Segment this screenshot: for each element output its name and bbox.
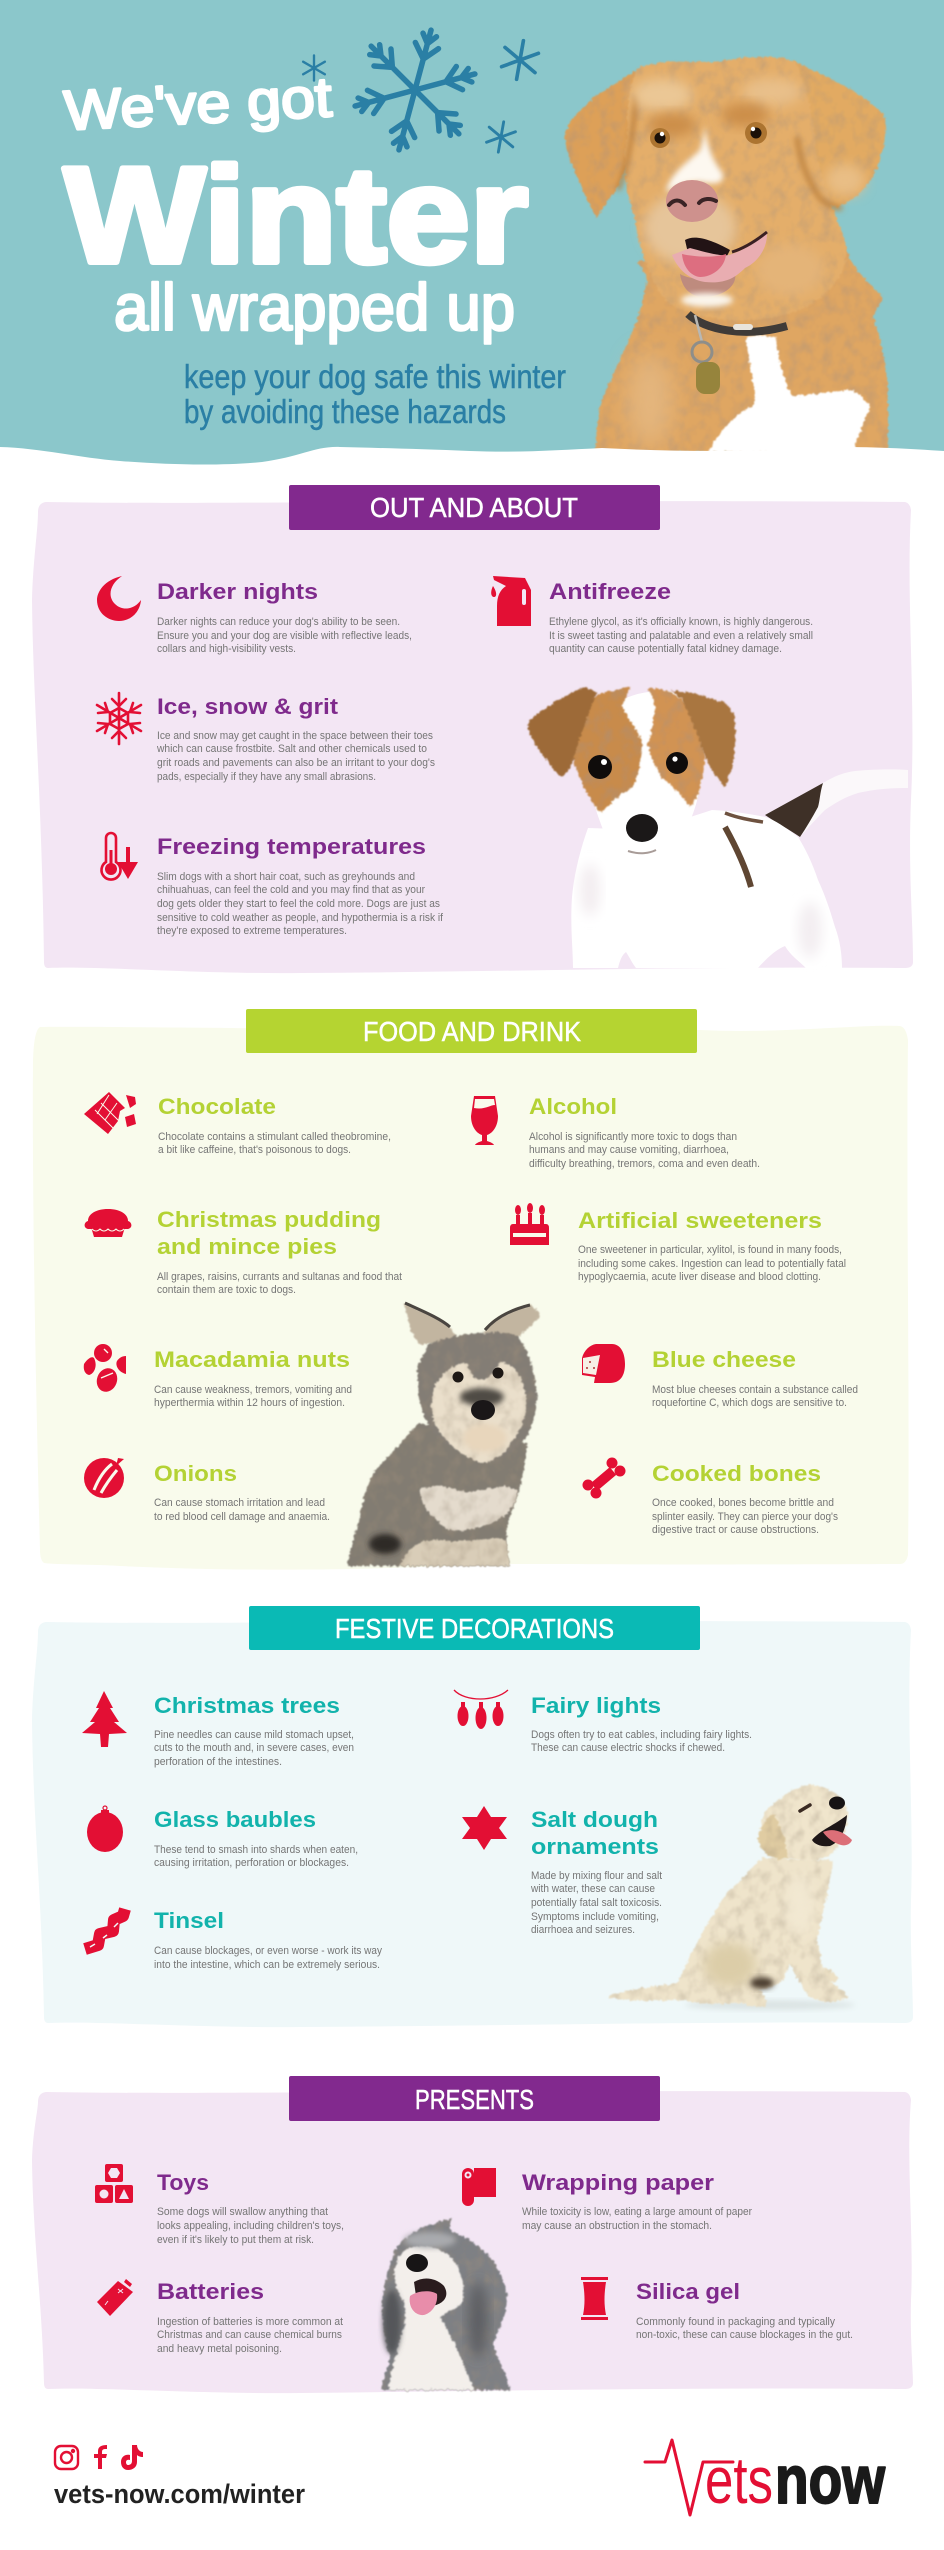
- eyes: [650, 128, 670, 148]
- icon: thermometer: [102, 833, 138, 880]
- icon: wrapping paper roll: [462, 2168, 496, 2206]
- item: darker nights: collars and high-visibility vests.: [157, 643, 296, 655]
- item: ice snow and grit: [97, 693, 435, 783]
- item: christmas trees: Pine needles can cause mild stomach upset,: [154, 1729, 354, 1741]
- item: freezing temperatures: [102, 833, 444, 937]
- item: christmas pudding and mince pies: Christmas pudding: [157, 1207, 381, 1232]
- item: onions: Can cause stomach irritation and lead: [154, 1497, 325, 1509]
- item: onions: to red blood cell damage and anaemia.: [154, 1511, 330, 1523]
- item: wrapping paper: Wrapping paper: [522, 2170, 714, 2195]
- item: ice snow and grit: Ice, snow & grit: [157, 694, 339, 719]
- item: cooked bones: Cooked bones: [652, 1461, 821, 1486]
- item: antifreeze: Ethylene glycol, as it's officially known, is highly dangerous.: [549, 616, 813, 628]
- icon: small snowflake right: [500, 38, 540, 82]
- item: christmas pudding and mince pies: All grapes, raisins, currants and sultanas and food that: [157, 1271, 402, 1283]
- icon: onion: [84, 1458, 124, 1498]
- icon: small snowflake left: [303, 55, 325, 81]
- subtitle: keep your dog safe this winter: [184, 358, 566, 395]
- panel: food and drink: [33, 1009, 909, 1570]
- item: alcohol: [471, 1094, 760, 1170]
- item: tinsel: [85, 1908, 382, 1971]
- item: artificial sweeteners: Artificial sweeteners: [578, 1208, 822, 1233]
- item: macadamia nuts: hyperthermia within 12 hours of ingestion.: [154, 1397, 345, 1409]
- item: freezing temperatures: dog gets older they start to feel the cold more. Dogs are just as: [157, 898, 440, 910]
- item: toys: even if it's likely to put them at risk.: [157, 2234, 314, 2246]
- section heading: PRESENTS: [415, 2084, 534, 2115]
- terrier photo: [347, 1303, 540, 1566]
- item: artificial sweeteners: including some cakes. Ingestion can lead to potentially fatal: [578, 1258, 846, 1270]
- item: glass baubles: [87, 1806, 358, 1869]
- head: [589, 691, 703, 857]
- item: christmas trees: cuts to the mouth and, in severe cases, even: [154, 1742, 354, 1754]
- icon: fairy lights: [454, 1690, 508, 1729]
- logo: vets now: ets: [705, 2443, 773, 2517]
- item: antifreeze: [491, 576, 813, 655]
- item: batteries: Christmas and can cause chemical burns: [157, 2329, 342, 2341]
- item: alcohol: Alcohol is significantly more toxic to dogs than: [529, 1131, 737, 1143]
- item: christmas trees: perforation of the intestines.: [154, 1756, 282, 1768]
- item: salt dough ornaments: Made by mixing flour and salt: [531, 1870, 662, 1882]
- item: cooked bones: Once cooked, bones become brittle and: [652, 1497, 834, 1509]
- item: blue cheese: roquefortine C, which dogs are sensitive to.: [652, 1397, 847, 1409]
- item: freezing temperatures: they're exposed to extreme temperatures.: [157, 925, 347, 937]
- icon: facebook: [94, 2445, 107, 2469]
- item: antifreeze: quantity can cause potentially fatal kidney damage.: [549, 643, 782, 655]
- puppy photo: [528, 688, 908, 968]
- item: salt dough ornaments: Symptoms include vomiting,: [531, 1911, 659, 1923]
- item: blue cheese: [582, 1344, 858, 1409]
- header: [0, 0, 944, 480]
- icon: birthday cake: [510, 1203, 549, 1245]
- item: alcohol: Alcohol: [529, 1094, 617, 1119]
- item: christmas trees: Christmas trees: [154, 1693, 340, 1718]
- section heading: OUT AND ABOUT: [370, 492, 578, 523]
- item: tinsel: Tinsel: [154, 1908, 224, 1933]
- panel background: [32, 501, 913, 973]
- title: [62, 65, 528, 344]
- panel: presents: [32, 2076, 913, 2393]
- item: batteries: Batteries: [157, 2279, 264, 2304]
- icon: instagram: [55, 2446, 78, 2469]
- item: christmas pudding and mince pies: and mince pies: [157, 1234, 337, 1259]
- item: chocolate: Chocolate: [158, 1094, 276, 1119]
- item: tinsel: into the intestine, which can be extremely serious.: [154, 1959, 380, 1971]
- item: alcohol: humans and may cause vomiting, diarrhoea,: [529, 1144, 729, 1156]
- item: chocolate: a bit like caffeine, that's poisonous to dogs.: [158, 1144, 351, 1156]
- golden puppy photo: [607, 1785, 855, 2010]
- section heading: [289, 485, 660, 530]
- item: freezing temperatures: Slim dogs with a short hair coat, such as greyhounds and: [157, 871, 415, 883]
- item: salt dough ornaments: Salt dough: [531, 1807, 658, 1832]
- item: batteries: and heavy metal poisoning.: [157, 2343, 282, 2355]
- item: salt dough ornaments: diarrhoea and seizures.: [531, 1924, 635, 1936]
- nose: [666, 180, 718, 222]
- item: christmas pudding and mince pies: contain them are toxic to dogs.: [157, 1284, 296, 1296]
- item: darker nights: [97, 576, 412, 655]
- collar and tag: [688, 314, 787, 332]
- item: silica gel: Silica gel: [636, 2279, 740, 2304]
- item: freezing temperatures: chihuahuas, can feel the cold and you may find that as your: [157, 884, 425, 896]
- item: blue cheese: Blue cheese: [652, 1347, 796, 1372]
- item: wrapping paper: may cause an obstruction in the stomach.: [522, 2220, 712, 2232]
- bearded collie photo: [380, 2218, 510, 2390]
- item: tinsel: Can cause blockages, or even worse - work its way: [154, 1945, 382, 1957]
- item: batteries: [97, 2279, 343, 2355]
- item: christmas trees: [82, 1691, 354, 1768]
- item: glass baubles: Glass baubles: [154, 1807, 316, 1832]
- item: glass baubles: These tend to smash into shards when eaten,: [154, 1844, 358, 1856]
- item: fairy lights: Fairy lights: [531, 1693, 661, 1718]
- section heading: [289, 2076, 660, 2121]
- item: blue cheese: Most blue cheeses contain a substance called: [652, 1384, 858, 1396]
- muzzle and chin: [680, 272, 735, 297]
- mouth: [685, 238, 730, 262]
- item: salt dough ornaments: ornaments: [531, 1834, 659, 1859]
- item: cooked bones: [582, 1458, 838, 1536]
- item: ice snow and grit: grit roads and pavements can also be an irritant to your dog's: [157, 757, 435, 769]
- item: artificial sweeteners: [510, 1203, 846, 1283]
- icon: wine glass: [471, 1096, 498, 1145]
- item: antifreeze: It is sweet tasting and palatable and even a relatively small: [549, 630, 813, 642]
- panel: festive decorations: [32, 1606, 913, 2027]
- item: salt dough ornaments: [462, 1806, 662, 1936]
- icon: bauble: [87, 1806, 123, 1852]
- section heading: FESTIVE DECORATIONS: [335, 1613, 614, 1644]
- item: fairy lights: Dogs often try to eat cables, including fairy lights.: [531, 1729, 752, 1741]
- item: ice snow and grit: which can cause frostbite. Salt and other chemicals used to: [156, 743, 427, 755]
- item: macadamia nuts: Can cause weakness, tremors, vomiting and: [154, 1384, 352, 1396]
- item: onions: Onions: [154, 1461, 237, 1486]
- header background: [0, 0, 944, 470]
- icon: mince pie: [85, 1209, 131, 1237]
- item: cooked bones: splinter easily. They can pierce your dog's: [652, 1511, 838, 1523]
- item: fairy lights: [454, 1690, 752, 1754]
- golden retriever photo: [565, 57, 888, 452]
- icon: toy blocks: [95, 2164, 133, 2203]
- item: artificial sweeteners: One sweetener in particular, xylitol, is found in many foods,: [578, 1244, 842, 1256]
- title: We've got: [62, 65, 334, 142]
- item: salt dough ornaments: potentially fatal salt toxicosis.: [531, 1897, 662, 1909]
- item: fairy lights: These can cause electric shocks if chewed.: [531, 1742, 725, 1754]
- subtitle: by avoiding these hazards: [184, 393, 506, 430]
- item: wrapping paper: While toxicity is low, eating a large amount of paper: [522, 2206, 752, 2218]
- icon: moon: [97, 576, 141, 621]
- item: silica gel: [581, 2277, 853, 2341]
- icon: silica gel packet: [581, 2277, 608, 2320]
- section heading: [246, 1009, 697, 1053]
- snow edge: [0, 447, 944, 480]
- item: glass baubles: causing irritation, perforation or blockages.: [154, 1857, 349, 1869]
- item: silica gel: Commonly found in packaging and typically: [636, 2316, 835, 2328]
- item: freezing temperatures: Freezing temperatures: [157, 834, 426, 859]
- panel background: [33, 1026, 909, 1570]
- icon: large snowflake: [341, 15, 489, 165]
- icon: antifreeze bottle: [491, 576, 531, 626]
- item: cooked bones: digestive tract or cause obstructions.: [652, 1524, 819, 1536]
- item: silica gel: non-toxic, these can cause blockages in the gut.: [636, 2329, 853, 2341]
- section heading: FOOD AND DRINK: [363, 1016, 581, 1047]
- icon: star: [462, 1806, 507, 1850]
- item: alcohol: difficulty breathing, tremors, coma and even death.: [529, 1158, 760, 1170]
- panel background: [32, 1621, 913, 2027]
- item: freezing temperatures: sensitive to cold weather as people, and hypothermia is a risk if: [157, 912, 444, 924]
- item: darker nights: Ensure you and your dog are visible with reflective leads,: [157, 630, 412, 642]
- icon: blue cheese: [582, 1344, 625, 1383]
- icon: tiktok: [121, 2445, 143, 2470]
- item: toys: Some dogs will swallow anything that: [157, 2206, 328, 2218]
- title: all wrapped up: [114, 270, 515, 344]
- icon: snowflake: [97, 693, 141, 744]
- panel background: [32, 2091, 913, 2393]
- item: wrapping paper: [462, 2168, 752, 2232]
- item: christmas pudding and mince pies: [85, 1207, 402, 1296]
- icon: christmas tree: [82, 1691, 127, 1747]
- item: toys: looks appealing, including children's toys,: [157, 2220, 344, 2232]
- icon: battery: [97, 2279, 133, 2316]
- icon: bone: [582, 1458, 626, 1498]
- white blaze: [666, 125, 723, 192]
- item: chocolate: Chocolate contains a stimulant called theobromine,: [158, 1131, 391, 1143]
- icon: chocolate bar: [84, 1092, 136, 1134]
- logo: vets now: now: [775, 2442, 886, 2518]
- logo: vets now: [645, 2440, 886, 2518]
- panel: out and about: [32, 485, 913, 973]
- subtitle: [184, 358, 566, 430]
- item: artificial sweeteners: hypoglycaemia, acute liver disease and blood clotting.: [578, 1271, 821, 1283]
- item: macadamia nuts: [84, 1344, 352, 1409]
- item: macadamia nuts: Macadamia nuts: [154, 1347, 350, 1372]
- icon: tinsel: [85, 1909, 125, 1949]
- section heading: [249, 1606, 700, 1650]
- website url: vets-now.com/winter: [54, 2479, 305, 2509]
- item: toys: Toys: [157, 2170, 209, 2195]
- item: darker nights: Darker nights: [157, 579, 318, 604]
- item: batteries: Ingestion of batteries is more common at: [157, 2316, 343, 2328]
- icon: macadamia nuts: [84, 1344, 126, 1395]
- item: salt dough ornaments: with water, these can cause: [530, 1883, 655, 1895]
- item: chocolate: [84, 1092, 391, 1156]
- item: antifreeze: Antifreeze: [549, 579, 671, 604]
- item: toys: [95, 2164, 344, 2246]
- chest white: [708, 336, 870, 452]
- item: darker nights: Darker nights can reduce your dog's ability to be seen.: [157, 616, 400, 628]
- title: Winter: [64, 139, 528, 291]
- item: onions: [84, 1458, 330, 1523]
- icon: small snowflake lower: [485, 120, 517, 154]
- item: ice snow and grit: pads, especially if they have any small abrasions.: [157, 771, 376, 783]
- footer: [54, 2440, 886, 2518]
- item: ice snow and grit: Ice and snow may get caught in the space between their toes: [157, 730, 433, 742]
